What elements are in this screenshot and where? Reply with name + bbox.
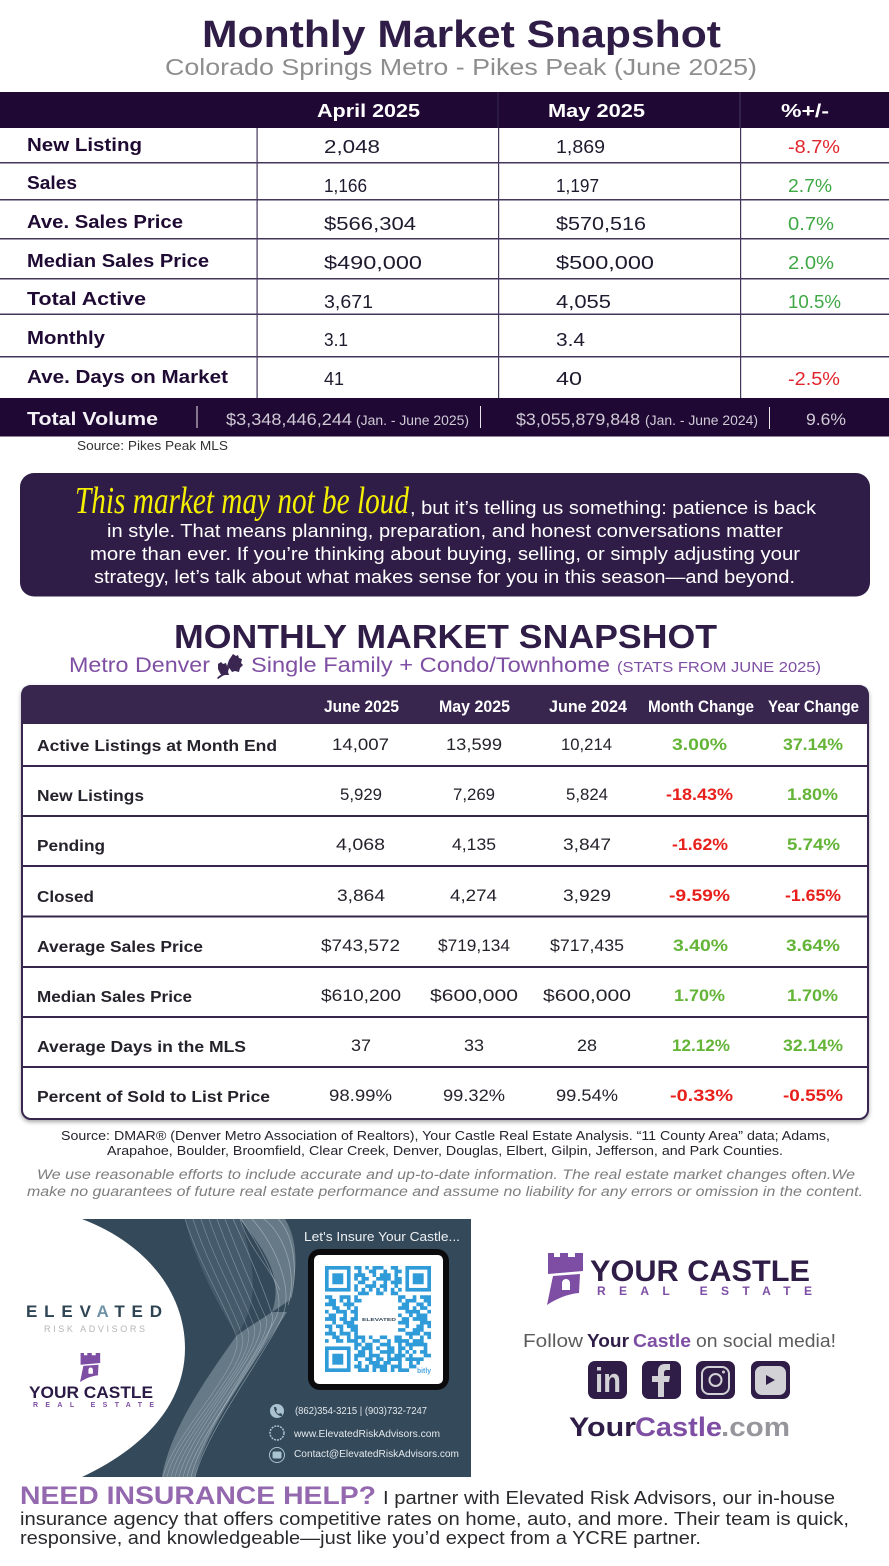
row: Average Sales Price: $719,134 xyxy=(438,937,510,955)
callout body: more than ever. If you’re thinking about buying, selling, or simply adjusting your xyxy=(90,544,800,564)
logo: Your Castle Real Estate xyxy=(547,1253,812,1305)
row: Average Sales Price: Average Sales Price xyxy=(37,939,203,956)
row: Median Sales Price: $610,200 xyxy=(321,987,401,1005)
row: New Listing: 2,048 xyxy=(324,137,380,157)
row: Total Active xyxy=(27,289,841,312)
row: Total Volume: Total Volume xyxy=(27,409,158,429)
table header: Month Change xyxy=(648,698,754,716)
row: New Listing xyxy=(27,135,840,157)
source footnote xyxy=(61,1128,830,1158)
insurance heading: NEED INSURANCE HELP? xyxy=(20,1482,376,1510)
row: Active Listings: 3.00% xyxy=(672,736,727,754)
row: Sales: 1,197 xyxy=(556,176,599,196)
row: Active Listings: 14,007 xyxy=(332,736,389,754)
row: Monthly: Monthly xyxy=(27,328,105,348)
row: New Listing: New Listing xyxy=(27,135,142,155)
row: Median Sales Price: $600,000 xyxy=(543,987,631,1005)
row: Sales: Sales xyxy=(27,173,77,193)
row: New Listings: 1.80% xyxy=(787,786,838,804)
row: New Listing: -8.7% xyxy=(788,137,840,157)
insurance paragraph: insurance agency that offers competitive rates on home, auto, and more. Their team is quick, xyxy=(20,1509,849,1529)
table: Colorado Springs metrics xyxy=(0,92,889,436)
row: Ave. Days on Market: 41 xyxy=(324,369,344,389)
row: Average Days in the MLS: 28 xyxy=(577,1037,597,1055)
row: Average Sales Price: 3.64% xyxy=(786,937,840,955)
insurance paragraph: I partner with Elevated Risk Advisors, our in-house xyxy=(383,1488,835,1508)
row: Average Days in the MLS xyxy=(37,1037,843,1056)
row: Closed: Closed xyxy=(37,889,94,906)
row: Average Sales Price: $743,572 xyxy=(321,937,400,955)
row: New Listings: 5,929 xyxy=(340,786,382,804)
row: Median Sales Price: $600,000 xyxy=(430,987,518,1005)
row: Average Days in the MLS: 33 xyxy=(464,1037,484,1055)
row: Percent of Sold to List Price xyxy=(37,1087,843,1106)
row: Total Volume: $3,348,446,244 xyxy=(226,411,352,429)
row: Median Sales Price: $500,000 xyxy=(556,253,654,273)
row: Median Sales Price: 1.70% xyxy=(674,987,725,1005)
disclaimer xyxy=(27,1167,863,1199)
row: Median Sales Price: 1.70% xyxy=(787,987,838,1005)
row: Closed: -9.59% xyxy=(669,887,730,905)
row: Pending: 3,847 xyxy=(563,836,611,854)
row: Median Sales Price: Median Sales Price xyxy=(37,989,192,1006)
row: Ave. Days on Market: Ave. Days on Market xyxy=(27,367,228,387)
row: Total Volume xyxy=(0,398,889,436)
contact details: www.ElevatedRiskAdvisors.com xyxy=(293,1429,440,1440)
row: Percent of Sold to List Price: 98.99% xyxy=(329,1087,392,1105)
row: Percent of Sold to List Price: -0.33% xyxy=(670,1087,733,1105)
row: Pending: 4,068 xyxy=(336,836,385,854)
source note: Source: Pikes Peak MLS xyxy=(77,438,228,453)
icon: Instagram xyxy=(696,1361,735,1399)
row: Total Active: Total Active xyxy=(27,289,146,309)
row: Total Volume: (Jan. - June 2025) xyxy=(356,413,469,428)
QR code xyxy=(308,1249,449,1390)
row: New Listings: New Listings xyxy=(37,788,144,805)
row: Active Listings: 13,599 xyxy=(446,736,502,754)
table header: Year Change xyxy=(768,698,859,716)
subtitle: Colorado Springs Metro - Pikes Peak (June 2025) xyxy=(165,54,757,80)
subheading: Metro Denver xyxy=(69,654,821,679)
social media prompt: on social media! xyxy=(696,1331,836,1351)
logo: Your Castle small: YOUR CASTLE xyxy=(29,1383,153,1402)
row: Average Days in the MLS: 37 xyxy=(351,1037,371,1055)
callout body: , but it’s telling us something: patience is back xyxy=(410,498,817,518)
row: Ave. Days on Market xyxy=(27,367,840,389)
row: Ave. Sales Price: 0.7% xyxy=(788,214,834,234)
insurance banner xyxy=(26,1219,471,1477)
logo: Your Castle Real Estate: YOUR CASTLE xyxy=(590,1255,810,1288)
row: Active Listings: 37.14% xyxy=(783,736,843,754)
row: Ave. Sales Price: Ave. Sales Price xyxy=(27,212,183,232)
row: New Listings: 7,269 xyxy=(453,786,495,804)
row: Average Sales Price xyxy=(37,937,840,956)
row: Average Sales Price: $717,435 xyxy=(550,937,624,955)
row: Monthly xyxy=(27,328,585,350)
icon: castle xyxy=(547,1253,583,1305)
row: Pending: -1.62% xyxy=(672,836,728,854)
table header: %+/- xyxy=(781,101,829,121)
logo: Elevated Risk Advisors: RISK ADVISORS xyxy=(44,1324,145,1334)
row: New Listings xyxy=(37,786,838,805)
logo: Your Castle small: REAL ESTATE xyxy=(33,1402,154,1409)
row: Total Volume: 9.6% xyxy=(806,411,846,429)
row: Median Sales Price: 2.0% xyxy=(788,253,834,273)
row: Closed: 4,274 xyxy=(450,887,497,905)
row: Percent of Sold to List Price: 99.54% xyxy=(556,1087,618,1105)
row: Closed xyxy=(37,887,841,906)
title: Monthly Market Snapshot xyxy=(202,14,721,56)
social media prompt: Follow xyxy=(523,1331,584,1351)
row: Ave. Sales Price: $566,304 xyxy=(324,214,416,234)
row: Monthly: 3.1 xyxy=(324,330,348,350)
row: Percent of Sold to List Price: -0.55% xyxy=(783,1087,843,1105)
row: Total Active: 3,671 xyxy=(324,292,373,312)
contact details: Contact@ElevatedRiskAdvisors.com xyxy=(294,1449,459,1460)
row: Closed: 3,864 xyxy=(337,887,385,905)
row: Percent of Sold to List Price: 99.32% xyxy=(443,1087,505,1105)
row: Active Listings: Active Listings at Month End xyxy=(37,738,277,755)
row: Sales: 2.7% xyxy=(788,176,832,196)
website xyxy=(569,1412,790,1442)
row: Ave. Days on Market: 40 xyxy=(556,369,582,389)
website: .com xyxy=(721,1412,790,1442)
row: Median Sales Price xyxy=(27,251,834,273)
row: New Listing: 1,869 xyxy=(556,137,605,157)
row: Sales: 1,166 xyxy=(324,176,367,196)
row: New Listings: 5,824 xyxy=(566,786,608,804)
wave graphic xyxy=(162,1219,295,1477)
table header: May 2025 xyxy=(439,698,510,716)
row: New Listings: -18.43% xyxy=(666,786,733,804)
row: Total Active: 10.5% xyxy=(788,292,841,312)
table header: June 2024 xyxy=(549,698,628,716)
insurance paragraph xyxy=(20,1488,849,1548)
row: Percent of Sold to List Price: Percent of Sold to List Price xyxy=(37,1089,270,1106)
insure heading: Let's Insure Your Castle... xyxy=(304,1229,460,1244)
callout body: in style. That means planning, preparation, and honest conversations matter xyxy=(107,521,783,541)
row: Average Days in the MLS: 32.14% xyxy=(783,1037,843,1055)
heading: Metro Denver: MONTHLY MARKET SNAPSHOT xyxy=(174,618,717,655)
icon: columbine leaf xyxy=(217,654,243,679)
row: Average Days in the MLS: Average Days in the MLS xyxy=(37,1039,246,1056)
table header: April 2025 xyxy=(317,101,420,121)
icon: LinkedIn: in xyxy=(595,1362,621,1400)
logo: Your Castle Real Estate: REAL ESTATE xyxy=(597,1284,812,1298)
table header: May 2025 xyxy=(548,101,645,121)
row: Sales xyxy=(27,173,832,196)
icon: YouTube xyxy=(751,1361,790,1399)
table header xyxy=(22,686,868,724)
subheading: Metro Denver: Single Family + Condo/Townhome xyxy=(251,654,610,677)
subheading: Metro Denver: (STATS FROM JUNE 2025) xyxy=(617,659,821,676)
icon: Facebook xyxy=(642,1361,681,1399)
contact details: (862)354-3215 | (903)732-7247 xyxy=(295,1406,427,1417)
table header xyxy=(0,92,889,128)
source footnote: Source: DMAR® (Denver Metro Association of Realtors), Your Castle Real Estate Analysis. “11 County Area” data; Adams, xyxy=(61,1128,830,1143)
row: Closed: -1.65% xyxy=(785,887,841,905)
disclaimer: make no guarantees of future real estate performance and assume no liability for any errors or omission in the content. xyxy=(27,1184,863,1199)
row: Pending: 4,135 xyxy=(452,836,496,854)
callout body xyxy=(90,498,817,587)
social media prompt: Your xyxy=(587,1331,629,1351)
row: Average Sales Price: 3.40% xyxy=(673,937,728,955)
callout headline: This market may not be loud xyxy=(75,480,410,522)
insurance paragraph: responsive, and knowledgeable—just like you’d expect from a YCRE partner. xyxy=(20,1528,701,1548)
QR code: ELEVATED xyxy=(362,1317,397,1322)
logo: Elevated Risk Advisors xyxy=(26,1302,162,1334)
row: Median Sales Price xyxy=(37,987,838,1006)
row: Ave. Sales Price xyxy=(27,212,834,234)
row: Closed: 3,929 xyxy=(563,887,611,905)
row: Active Listings xyxy=(37,736,843,755)
row: Total Active: 4,055 xyxy=(556,292,611,312)
social media prompt: Castle xyxy=(633,1331,691,1351)
website: Castle xyxy=(635,1412,722,1442)
row: Total Volume: $3,055,879,848 xyxy=(516,411,640,429)
row: Ave. Sales Price: $570,516 xyxy=(556,214,646,234)
disclaimer: We use reasonable efforts to include accurate and up-to-date information. The real estate market changes often.We xyxy=(37,1167,855,1182)
row: Pending: Pending xyxy=(37,838,105,855)
row: Monthly: 3.4 xyxy=(556,330,585,350)
row: Median Sales Price: Median Sales Price xyxy=(27,251,209,271)
row: Pending xyxy=(37,836,840,855)
logo: Your Castle small xyxy=(29,1353,154,1409)
callout body: strategy, let’s talk about what makes sense for you in this season—and beyond. xyxy=(94,567,795,587)
row: Ave. Days on Market: -2.5% xyxy=(788,369,840,389)
row: Average Days in the MLS: 12.12% xyxy=(672,1037,730,1055)
row: Active Listings: 10,214 xyxy=(561,736,612,754)
row: Pending: 5.74% xyxy=(787,836,840,854)
row: Total Volume: (Jan. - June 2024) xyxy=(645,413,758,428)
social media prompt xyxy=(523,1331,836,1351)
logo: Elevated Risk Advisors: ELEV A TED xyxy=(26,1302,162,1321)
callout panel xyxy=(20,473,870,596)
QR code: bitly xyxy=(417,1368,431,1375)
website: Your xyxy=(569,1412,637,1442)
subheading: Metro Denver: Metro Denver xyxy=(69,654,210,677)
row: Median Sales Price: $490,000 xyxy=(324,253,422,273)
table: Metro Denver metrics xyxy=(22,686,868,1119)
contact details xyxy=(270,1404,459,1462)
source footnote: Arapahoe, Boulder, Broomfield, Clear Creek, Denver, Douglas, Elbert, Gilpin, Jefferson, and Park Counties. xyxy=(107,1143,783,1158)
table header: June 2025 xyxy=(324,698,399,716)
